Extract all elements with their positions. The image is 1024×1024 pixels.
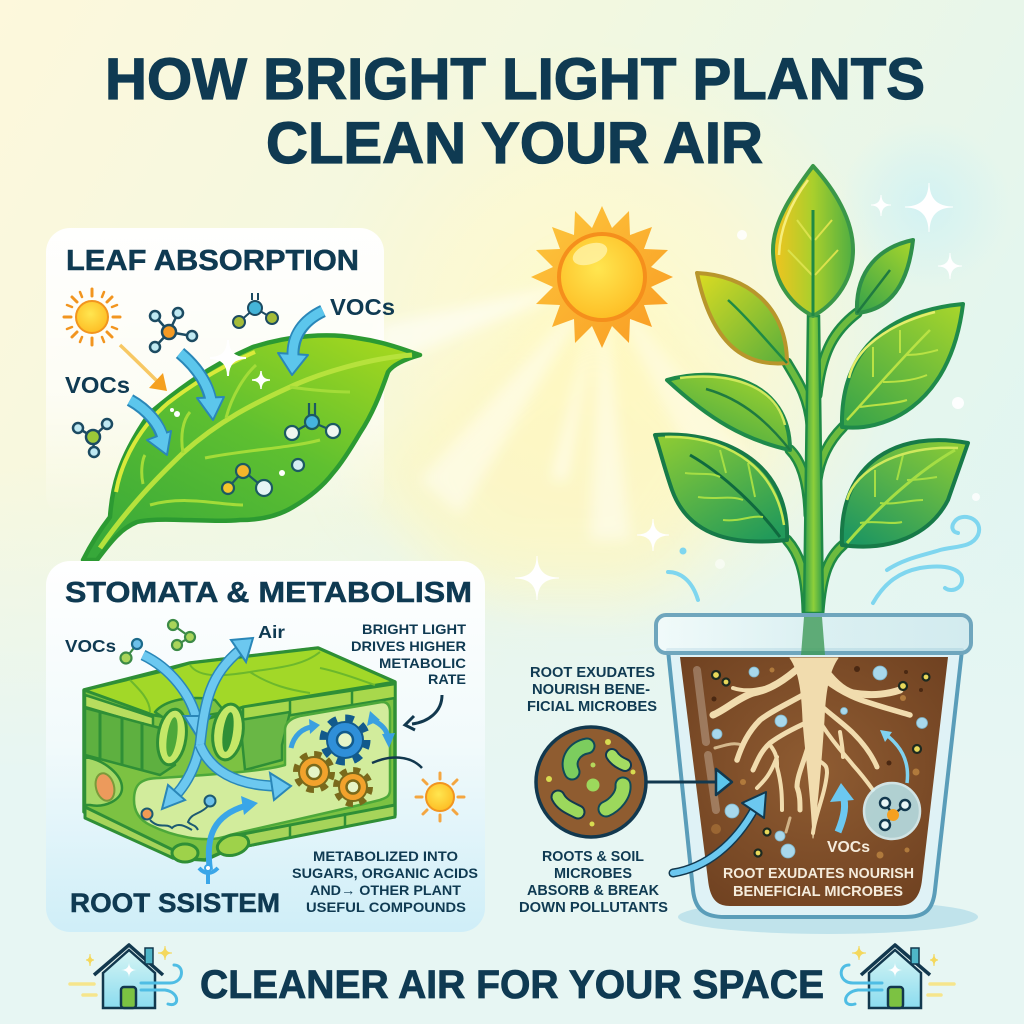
title [105,47,925,176]
leaf: lower right [842,440,968,547]
soil particles and bubbles [711,666,930,858]
leaf cross-section block [84,648,395,862]
icon: right house [841,945,954,1008]
gear: orange left [297,755,331,789]
arrow: roots and soil [673,792,766,873]
label: VOCs left: VOCs [65,372,130,398]
label: VOCs in soil: VOCs [827,839,870,856]
text: metabolized into: SUGARS, ORGANIC ACIDS [292,865,478,881]
gear: orange right [337,771,369,803]
icon: small sun right [416,773,464,821]
plant [655,166,968,613]
text: bright light: METABOLIC [379,655,466,671]
icon: large sun [531,206,673,348]
text: roots and soil microbes: DOWN POLLUTANTS [519,900,668,916]
text: roots and soil microbes [519,849,668,916]
pot body [668,650,962,917]
text: root exudates: ROOT EXUDATES [530,665,655,681]
text: bright light: BRIGHT LIGHT [362,621,466,637]
leaf: middle left [667,375,790,450]
heading: root system: ROOT SSISTEM [70,888,280,918]
leaf: top [773,166,853,316]
text: metabolized into: METABOLIZED INTO [313,848,458,864]
soil caption: BENEFICIAL MICROBES [733,883,903,900]
icon: left house [70,945,181,1008]
molecules: inside cell [142,796,216,830]
panel: stomata and metabolism [46,561,485,932]
plant pot with soil [656,615,971,917]
footer banner [70,945,954,1008]
arrows: gear cycle [291,711,395,748]
pot shadow [678,900,978,934]
VOC bubble [864,730,920,839]
text: roots and soil microbes: ABSORB & BREAK [527,883,660,899]
molecule: orange centre [150,308,197,352]
soil caption [723,865,914,900]
text: roots and soil microbes: ROOTS & SOIL [542,849,644,865]
molecules on leaf [222,403,340,496]
heading: leaf absorption: LEAF ABSORPTION [66,245,359,277]
bacteria [558,746,625,812]
text: roots and soil microbes: MICROBES [554,866,632,882]
wind swirls [668,517,979,603]
arrow: VOCs left [130,400,171,455]
leaf: lower left [655,434,787,542]
text: metabolized into [292,848,478,915]
arrow: VOCs inside soil [830,783,854,832]
arrow: VOCs centre [180,353,224,420]
gear: blue [324,719,366,761]
leaf: upper right small [857,240,913,313]
text: root exudates: FICIAL MICROBES [527,699,657,715]
arrow: VOCs top right [278,311,323,375]
pot rim [656,615,971,653]
main stem [804,316,823,613]
arrow: root uplift [199,796,258,884]
text: root exudates: NOURISH BENE- [532,682,650,698]
leaf: upper left [697,273,787,363]
leaf: middle right [842,304,963,428]
pot highlights [697,670,716,810]
text: bright light [351,621,466,687]
heading: stomata and metabolism: STOMATA & METABOLISM [65,577,472,609]
molecules: small [120,620,195,664]
sparkles on leaf [170,340,285,476]
microbe circle [536,727,646,837]
text: bright light: RATE [428,671,466,687]
stomata guard cells [154,698,247,767]
soil [680,657,948,906]
arrows: gas exchange [143,638,291,809]
text: bright light: DRIVES HIGHER [351,638,466,654]
panel: leaf absorption [46,228,420,560]
stem and branches [787,313,857,612]
title: HOW BRIGHT LIGHT PLANTS [105,47,925,112]
soil caption: ROOT EXUDATES NOURISH [723,865,914,882]
title: CLEAN YOUR AIR [266,111,763,176]
label: VOCs: VOCs [65,636,116,656]
molecule: green centre [73,419,112,457]
text: root exudates [527,665,657,715]
molecule: blue centre [233,293,278,328]
leaf illustration [83,335,420,560]
gears [297,719,369,803]
footer text: CLEANER AIR FOR YOUR SPACE [200,963,824,1007]
icon: small sun [64,289,120,345]
arrow: light onto leaf [120,345,167,391]
text: metabolized into: AND→ OTHER PLANT [310,882,461,898]
arrow: microbes to soil [647,769,732,795]
roots [713,658,910,838]
stem through rim [801,617,825,655]
sparkles around plant [515,183,980,600]
label: VOCs right: VOCs [330,294,395,320]
label: Air: Air [258,622,285,642]
arrow: light to metabolic rate [372,695,442,768]
text: metabolized into: USEFUL COMPOUNDS [306,899,466,915]
